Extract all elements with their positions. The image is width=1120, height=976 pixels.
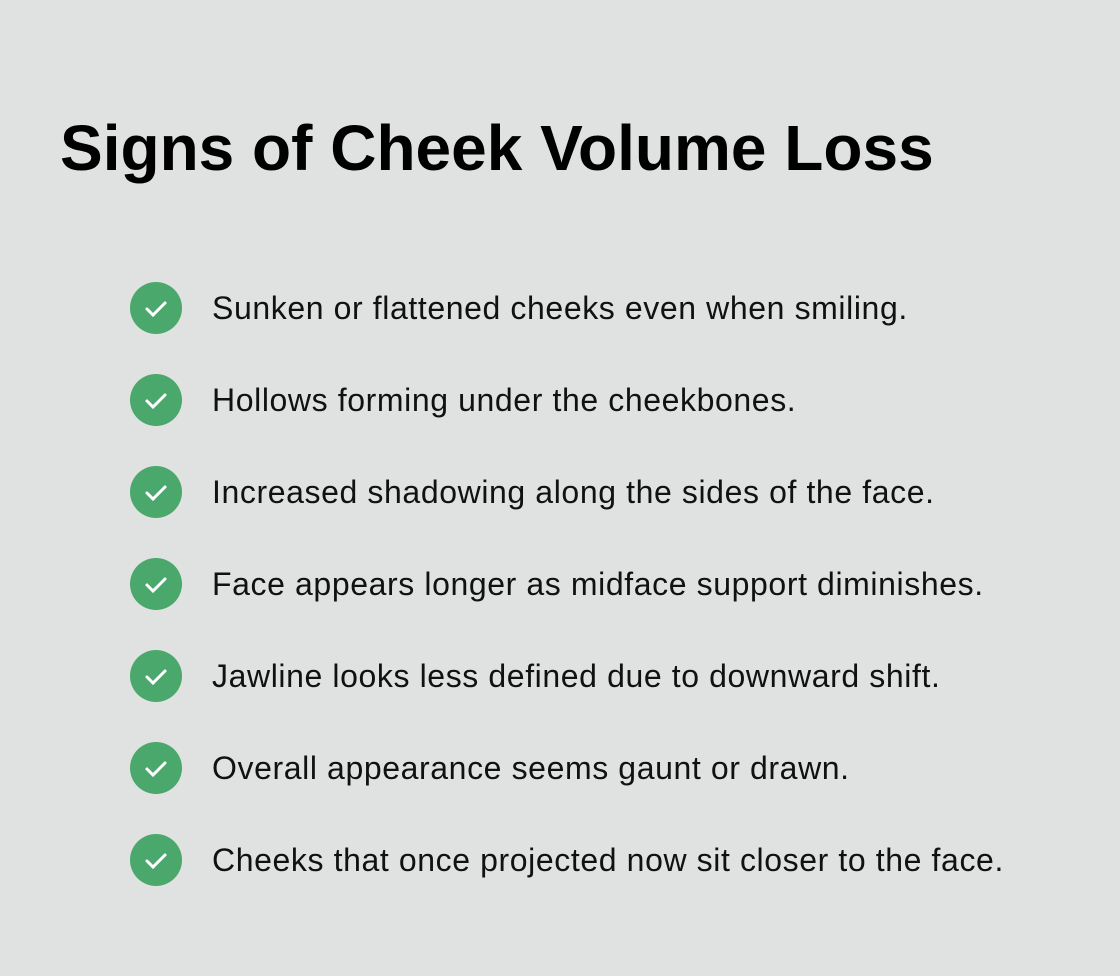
list item 4 — [130, 558, 984, 610]
list item 5 — [130, 650, 940, 702]
icon: check — [130, 374, 182, 426]
text: Face appears longer as midface support diminishes. — [212, 566, 984, 602]
icon: check — [130, 742, 182, 794]
title: Signs of Cheek Volume Loss — [60, 112, 934, 184]
text: Sunken or flattened cheeks even when smiling. — [212, 290, 908, 326]
text: Increased shadowing along the sides of the face. — [212, 474, 935, 510]
list item 3 — [130, 466, 935, 518]
icon: check — [130, 834, 182, 886]
list item 2 — [130, 374, 796, 426]
text: Jawline looks less defined due to downward shift. — [212, 658, 940, 694]
icon: check — [130, 558, 182, 610]
list item 7 — [130, 834, 1004, 886]
list item 1 — [130, 282, 908, 334]
list item 6 — [130, 742, 850, 794]
icon: check — [130, 282, 182, 334]
text: Cheeks that once projected now sit closer to the face. — [212, 842, 1004, 878]
text: Overall appearance seems gaunt or drawn. — [212, 750, 850, 786]
icon: check — [130, 650, 182, 702]
icon: check — [130, 466, 182, 518]
text: Hollows forming under the cheekbones. — [212, 382, 796, 418]
